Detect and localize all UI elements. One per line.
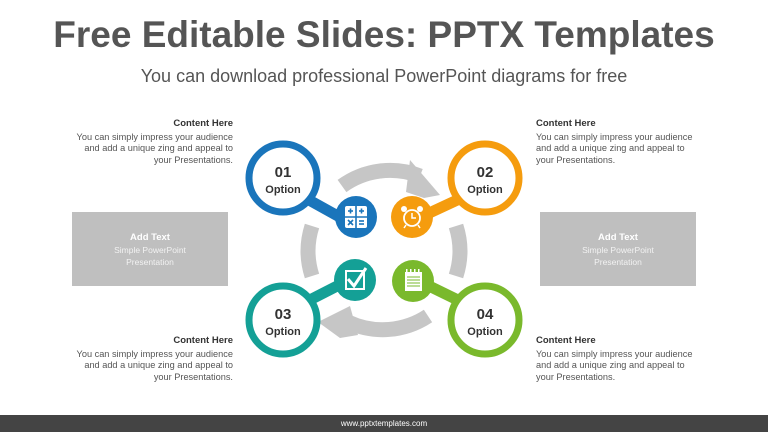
text block: bottom left: your Presentations. (154, 372, 233, 382)
option 02 (451, 144, 519, 212)
text block: top right: Content Here (536, 118, 596, 129)
icon: notepad (392, 260, 434, 302)
text block: bottom right: and add a unique zing and appeal to (536, 360, 685, 370)
footer (0, 415, 768, 432)
text block: bottom right: your Presentations. (536, 372, 615, 382)
text block: top left: Content Here (173, 118, 233, 129)
icon: checkbox (334, 259, 376, 301)
option 02: Option (467, 184, 503, 196)
option 04: 04 (477, 306, 494, 323)
text block: bottom left (76, 335, 233, 382)
text block: top left: and add a unique zing and appeal to (84, 143, 233, 153)
text block: bottom right (536, 335, 692, 382)
subtitle: You can download professional PowerPoint diagrams for free (141, 66, 627, 86)
text block: bottom right: Content Here (536, 335, 596, 346)
text block: top left: You can simply impress your audience (77, 132, 233, 142)
option 01: 01 (275, 164, 291, 181)
connectors (300, 195, 468, 305)
text block: top right: your Presentations. (536, 154, 615, 164)
box: right add text: Presentation (594, 257, 642, 267)
box: right add text: Simple PowerPoint (582, 245, 654, 255)
icon: calculator (335, 196, 377, 238)
text block: bottom left: You can simply impress your audience (77, 348, 233, 358)
option 03 (249, 286, 317, 354)
text block: top right: and add a unique zing and appeal to (536, 143, 685, 153)
option 04 (451, 286, 519, 354)
title: Free Editable Slides: PPTX Templates (53, 14, 715, 55)
icon: alarm clock (391, 196, 433, 238)
footer: www.pptxtemplates.com (341, 419, 427, 428)
option 03: Option (265, 326, 301, 338)
text block: top left: your Presentations. (154, 154, 233, 164)
box: right add text (540, 212, 696, 286)
option 04: Option (467, 326, 503, 338)
box: left add text: Add Text (130, 232, 170, 243)
box: left add text (72, 212, 228, 286)
box: left add text: Presentation (126, 257, 174, 267)
option 03: 03 (275, 306, 291, 323)
option 02: 02 (477, 164, 493, 181)
gray cycle arrows (308, 170, 460, 330)
text block: bottom left: and add a unique zing and appeal to (84, 360, 233, 370)
text block: bottom right: You can simply impress your audience (536, 348, 692, 358)
text block: top left (76, 118, 233, 165)
text block: top right (536, 118, 692, 165)
box: left add text: Simple PowerPoint (114, 245, 186, 255)
text block: bottom left: Content Here (173, 335, 233, 346)
box: right add text: Add Text (598, 232, 638, 243)
option 01: Option (265, 184, 301, 196)
option 01 (249, 144, 317, 212)
text block: top right: You can simply impress your audience (536, 132, 692, 142)
